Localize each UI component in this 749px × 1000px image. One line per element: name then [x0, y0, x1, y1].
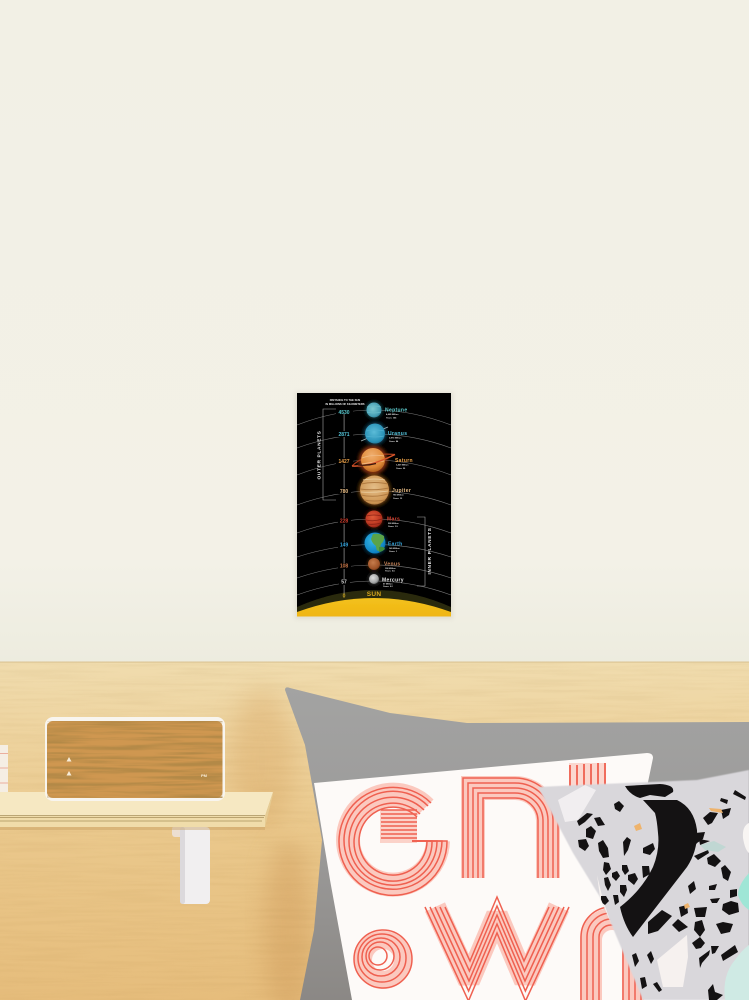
label: Jupiter	[392, 488, 411, 500]
label: Saturn	[395, 458, 412, 469]
distance values: 108	[340, 564, 348, 570]
clock indicators: PM	[201, 773, 208, 778]
planet: Jupiter	[358, 474, 390, 506]
label: Saturn: Years: 29	[396, 467, 406, 470]
inner planets bracket: INNER PLANETS	[427, 527, 433, 575]
wooden clock	[45, 717, 225, 801]
label: Mars: 228 Million	[388, 523, 399, 525]
distance axis	[344, 414, 345, 594]
distance values: 780	[340, 489, 348, 495]
shelf	[0, 792, 273, 830]
label: Earth	[388, 542, 402, 552]
label: Neptune: Neptune	[385, 408, 407, 414]
poster: solar system	[295, 392, 453, 619]
label: Saturn: 1,427 Million	[396, 464, 409, 466]
wooden ledge	[0, 662, 749, 1000]
label: Earth: 149 Million	[389, 547, 400, 550]
planet labels	[382, 408, 413, 588]
label: Earth: Years: 1	[389, 550, 398, 553]
sun	[297, 590, 451, 617]
planet: Uranus	[361, 422, 388, 445]
distance values	[336, 408, 353, 600]
room scene	[0, 392, 749, 1000]
black arc	[620, 800, 697, 937]
label: Saturn: Saturn	[395, 458, 413, 464]
label: Mercury: Mercury	[382, 578, 404, 584]
inner planets bracket	[417, 516, 431, 586]
label: Mercury	[382, 578, 404, 587]
upper letter fragment	[569, 763, 606, 787]
white blobs	[657, 935, 688, 987]
label: Uranus: Years: 84	[389, 440, 399, 443]
black top blob	[625, 784, 673, 798]
label: Uranus: Uranus	[388, 431, 407, 437]
label: Venus	[384, 562, 400, 572]
label: Mars: Mars	[387, 516, 400, 522]
right letter fragment	[581, 907, 641, 1000]
letter R	[463, 778, 558, 878]
planet: Mercury	[368, 573, 380, 585]
terrazzo chips	[577, 790, 749, 1000]
label: Venus: Years: 0.6	[385, 570, 396, 572]
label: Neptune: 4,495 Million	[386, 413, 399, 416]
distance values: 57	[341, 580, 347, 586]
label: Uranus	[388, 431, 407, 443]
planet: Mars	[364, 510, 384, 528]
label: Venus: Venus	[384, 562, 400, 568]
distance values: 1427	[338, 459, 350, 465]
planet: Neptune	[366, 402, 382, 418]
white patterned pillow	[314, 753, 749, 1000]
label: Neptune: Years: 165	[386, 416, 397, 420]
wall background	[0, 0, 749, 662]
planet: Earth	[363, 531, 387, 555]
distance values: 0	[343, 594, 346, 600]
label: Jupiter: Years: 12	[393, 497, 403, 500]
outer planets bracket	[316, 409, 336, 500]
axis title: IN MILLIONS OF KILOMETERS	[325, 402, 365, 406]
mint and cream accents	[738, 873, 749, 910]
letter G	[339, 787, 447, 895]
wall bracket	[172, 826, 210, 904]
axis title	[326, 399, 364, 405]
letter O	[354, 930, 412, 988]
axis title: DISTANCE TO THE SUN	[330, 398, 360, 402]
orbit lines	[297, 410, 451, 595]
label: Neptune	[385, 408, 407, 418]
label: Mercury: 57 Million	[383, 584, 393, 586]
label: Earth: Earth	[388, 542, 403, 548]
letter W	[425, 897, 569, 1000]
distance values: 4530	[338, 410, 350, 416]
label: Venus: 108 Million	[385, 568, 396, 570]
label: Mercury: Years: 0.2	[383, 585, 394, 588]
label: Uranus: 2,871 Million	[389, 438, 402, 440]
label: Mars	[387, 516, 400, 528]
letter blocks	[0, 745, 8, 792]
planet: Venus	[367, 557, 381, 571]
grey back pillow	[285, 687, 749, 1000]
distance values: 2871	[338, 432, 350, 438]
label: Jupiter: 780 Million	[393, 494, 404, 496]
terrazzo pillow	[538, 770, 749, 1000]
sun: SUN	[367, 591, 381, 598]
label: Mars: Years: 1.9	[388, 525, 399, 528]
distance values: 149	[340, 542, 348, 548]
distance values: 228	[340, 518, 348, 524]
clock indicators	[66, 757, 208, 778]
planet: Saturn	[352, 446, 395, 474]
outer planets bracket: OUTER PLANETS	[316, 430, 322, 479]
label: Jupiter: Jupiter	[392, 488, 411, 494]
